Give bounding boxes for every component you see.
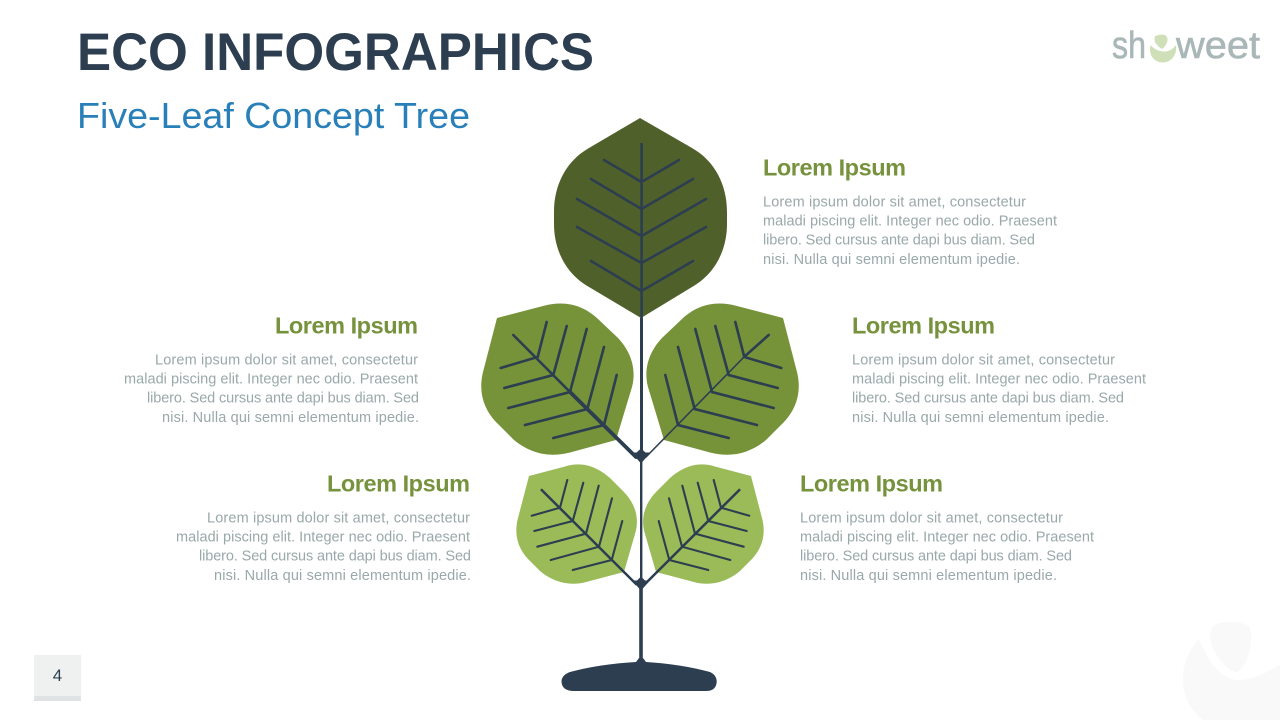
text block: lower right	[800, 470, 1094, 584]
text block: lower left	[176, 470, 471, 584]
text block: lower left: Lorem Ipsum	[327, 470, 470, 496]
watermark logo	[1183, 622, 1280, 720]
text block: lower left: nisi. Nulla qui semni elementum ipedie.	[214, 568, 471, 584]
text block: lower left: Lorem ipsum dolor sit amet, consectetur	[207, 510, 470, 526]
text block: middle left: maladi piscing elit. Integer nec odio. Praesent	[124, 372, 418, 388]
title: ECO INFOGRAPHICS	[77, 23, 594, 82]
text block: lower left: libero. Sed cursus ante dapi bus diam. Sed	[199, 548, 471, 564]
text block: middle left: Lorem Ipsum	[275, 312, 418, 338]
text block: lower right: Lorem ipsum dolor sit amet, consectetur	[800, 510, 1063, 526]
page number: 4	[53, 666, 62, 685]
ground mound	[562, 658, 717, 691]
tree illustration	[481, 118, 799, 691]
text block: middle right	[852, 312, 1146, 426]
text block: top right: maladi piscing elit. Integer nec odio. Praesent	[763, 214, 1057, 230]
brand logo: weet	[1175, 25, 1260, 67]
text block: middle right: libero. Sed cursus ante dapi bus diam. Sed	[852, 390, 1124, 406]
subtitle: Five-Leaf Concept Tree	[77, 95, 470, 136]
text block: middle left	[124, 312, 419, 426]
lower left leaf	[516, 464, 637, 584]
brand logo	[1112, 25, 1260, 67]
text block: top right: Lorem ipsum dolor sit amet, consectetur	[763, 194, 1026, 210]
text block: middle right: Lorem ipsum dolor sit amet, consectetur	[852, 352, 1115, 368]
text block: lower right: nisi. Nulla qui semni elementum ipedie.	[800, 568, 1057, 584]
text block: middle left: Lorem ipsum dolor sit amet, consectetur	[155, 352, 418, 368]
text block: middle right: nisi. Nulla qui semni elementum ipedie.	[852, 410, 1109, 426]
top dark leaf	[554, 118, 727, 318]
text block: top right: libero. Sed cursus ante dapi bus diam. Sed	[763, 232, 1035, 248]
text block: top right: Lorem Ipsum	[763, 154, 906, 180]
middle left leaf	[481, 304, 636, 457]
middle right leaf	[646, 304, 799, 457]
text block: middle left: libero. Sed cursus ante dapi bus diam. Sed	[147, 390, 419, 406]
text block: lower right: Lorem Ipsum	[800, 470, 943, 496]
text block: middle right: maladi piscing elit. Integer nec odio. Praesent	[852, 372, 1146, 388]
text block: lower right: maladi piscing elit. Integer nec odio. Praesent	[800, 530, 1094, 546]
text block: middle right: Lorem Ipsum	[852, 312, 995, 338]
text block: lower right: libero. Sed cursus ante dapi bus diam. Sed	[800, 548, 1072, 564]
brand logo: sh	[1112, 25, 1146, 67]
text block: top right	[763, 154, 1057, 268]
text block: top right: nisi. Nulla qui semni elementum ipedie.	[763, 252, 1020, 268]
text block: middle left: nisi. Nulla qui semni elementum ipedie.	[162, 410, 419, 426]
trunk and stem	[632, 143, 650, 664]
lower right leaf	[643, 464, 764, 584]
text block: lower left: maladi piscing elit. Integer nec odio. Praesent	[176, 530, 470, 546]
page number	[34, 655, 81, 701]
